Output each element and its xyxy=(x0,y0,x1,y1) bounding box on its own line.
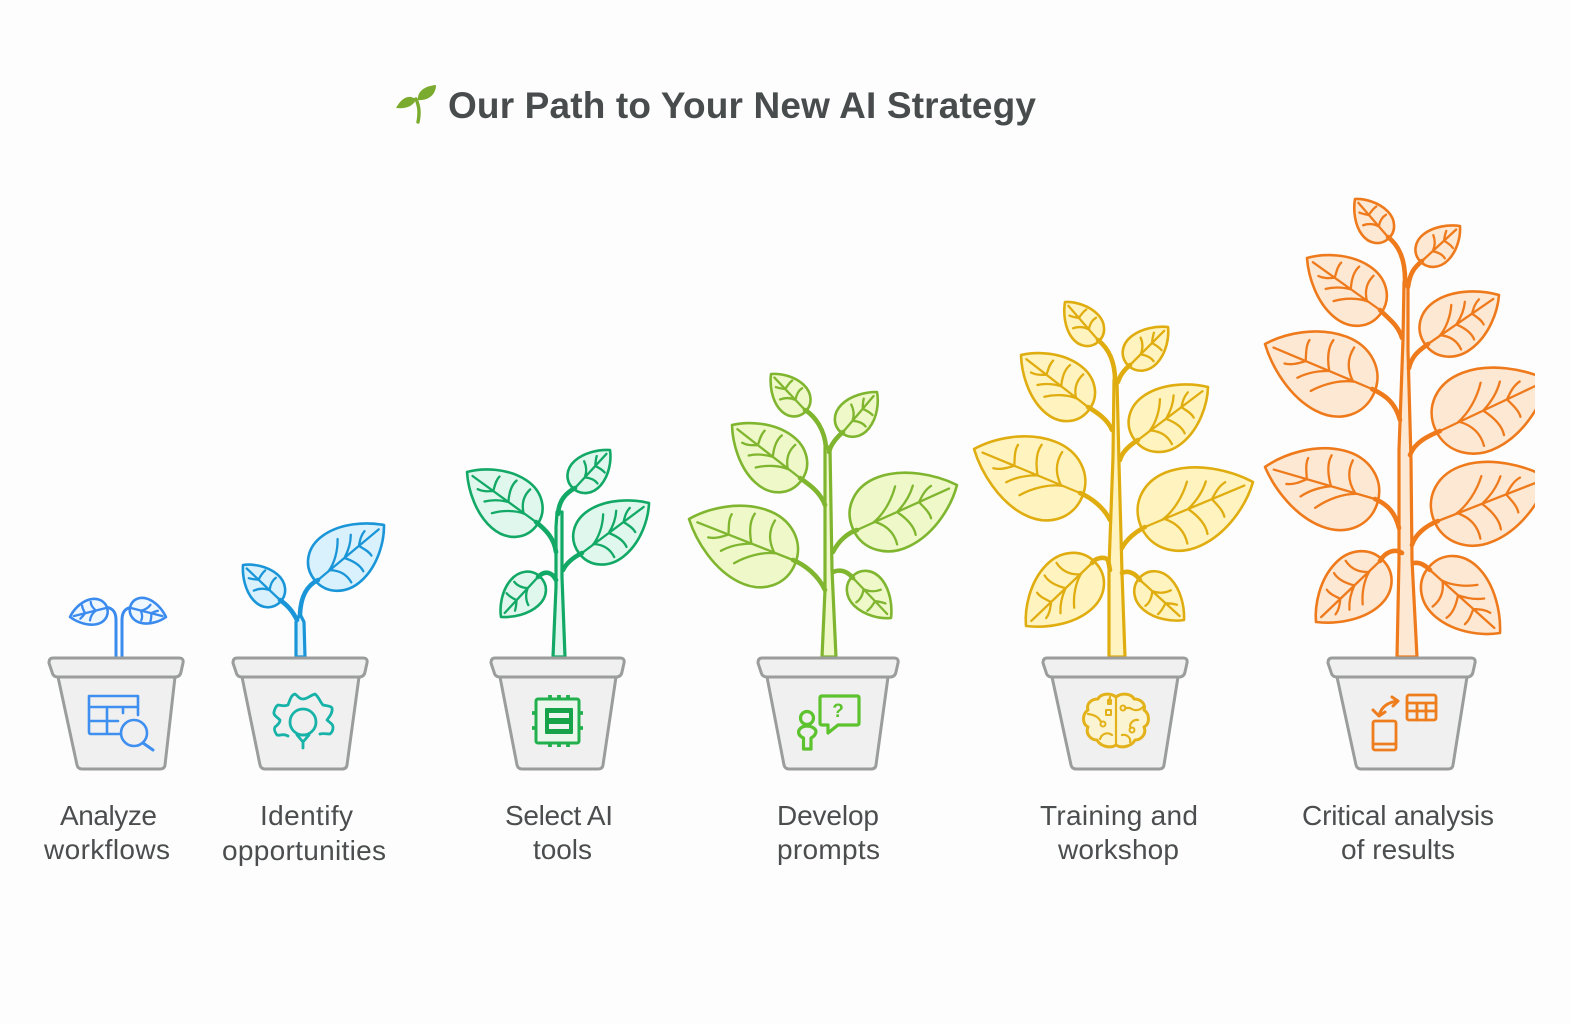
step 1: analyze workflows xyxy=(43,595,183,865)
pot xyxy=(758,658,898,769)
label: Critical analysis xyxy=(1302,800,1494,831)
icon: table with magnifier xyxy=(89,696,153,750)
leaves xyxy=(958,291,1268,650)
label xyxy=(1040,800,1198,865)
petioles xyxy=(1080,340,1145,580)
icon: tablet, arrows and table xyxy=(1373,695,1436,750)
pot xyxy=(1043,658,1187,769)
label: opportunities xyxy=(222,835,386,866)
label: of results xyxy=(1341,834,1455,865)
stem xyxy=(296,614,305,657)
title xyxy=(396,85,1036,126)
pot xyxy=(49,658,183,769)
label: Training and xyxy=(1040,800,1198,831)
label: Develop xyxy=(777,800,879,831)
label xyxy=(43,800,170,865)
step 5: training and workshop xyxy=(958,291,1268,865)
leaves xyxy=(674,363,972,631)
pot xyxy=(491,658,624,769)
stem xyxy=(103,607,135,657)
petioles xyxy=(793,410,857,590)
icon: sprout xyxy=(396,85,436,122)
step 2: identify opportunities xyxy=(222,501,402,866)
icon: AI chip xyxy=(532,695,583,747)
petioles xyxy=(280,580,318,620)
icon: gear with light bulb xyxy=(274,694,333,748)
stem xyxy=(553,512,565,657)
label xyxy=(222,800,386,866)
leaves xyxy=(230,501,402,614)
step 3: select AI tools xyxy=(449,437,666,865)
icon: brain xyxy=(1084,694,1148,747)
label: workshop xyxy=(1057,834,1179,865)
leaves xyxy=(1264,198,1535,636)
stem xyxy=(1109,380,1125,657)
leaves xyxy=(67,595,169,630)
label: workflows xyxy=(43,834,170,865)
icon: person with question bubble: ? xyxy=(832,701,844,722)
label: prompts xyxy=(777,834,880,865)
label xyxy=(777,800,880,865)
step 4: develop prompts xyxy=(674,363,972,865)
step 6: critical analysis of results xyxy=(1264,198,1535,860)
stem xyxy=(1397,282,1417,657)
label: Select AI xyxy=(505,800,613,831)
label xyxy=(1302,800,1494,865)
title text: Our Path to Your New AI Strategy xyxy=(448,85,1036,126)
petioles xyxy=(536,488,582,580)
petioles xyxy=(1372,237,1440,570)
label: Identify xyxy=(260,800,353,831)
stem xyxy=(822,447,836,657)
label xyxy=(505,800,613,865)
icon: person with question bubble xyxy=(799,696,859,749)
leaves xyxy=(449,437,666,630)
label: Analyze xyxy=(60,800,157,831)
pot xyxy=(233,658,367,769)
pot xyxy=(1328,658,1475,769)
label: tools xyxy=(533,834,592,865)
